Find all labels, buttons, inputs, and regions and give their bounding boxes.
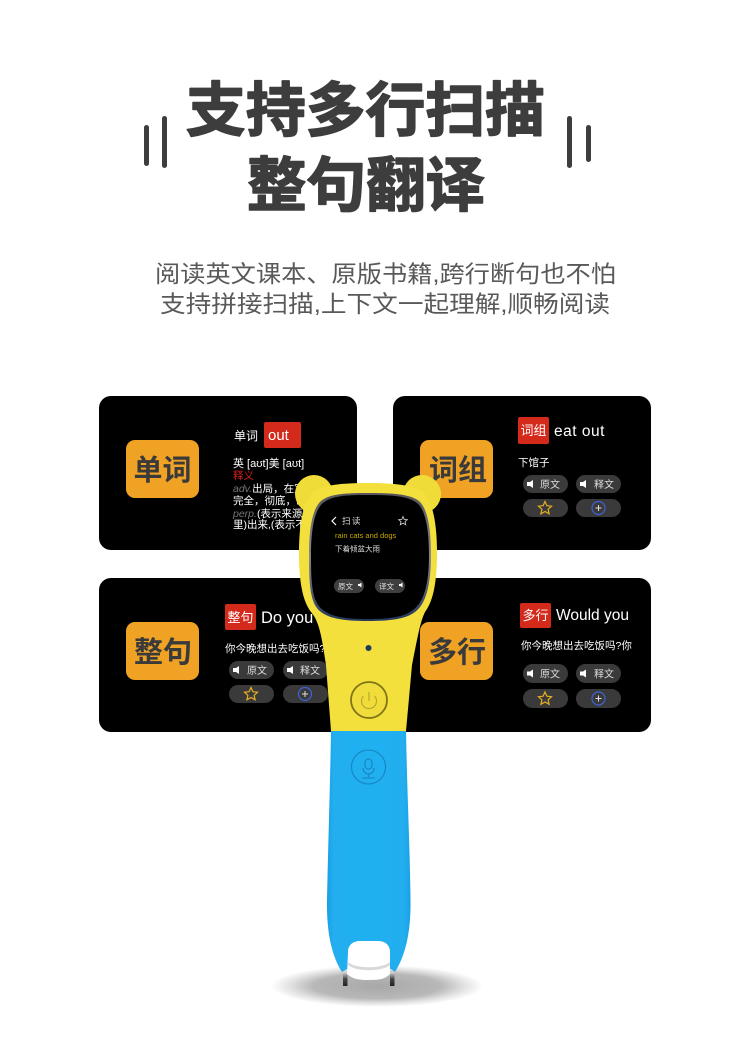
audio buttons: 释文	[300, 664, 320, 677]
badge: 词组	[420, 440, 493, 498]
translation: 你今晚想出去吃饭吗?你	[521, 639, 632, 652]
pen upper body	[299, 483, 437, 731]
translation: 你今晚想出去吃饭吗?	[225, 642, 325, 655]
phrase heading: 词组	[520, 423, 547, 438]
decorative bars right of title	[567, 116, 591, 168]
badge: 单词: 单词	[133, 454, 192, 487]
multi-line heading: Would you	[556, 607, 629, 624]
badge: 多行: 多行	[428, 636, 486, 669]
badge: 整句: 整句	[134, 636, 192, 669]
multi-line heading	[520, 603, 629, 628]
pen tip	[347, 941, 390, 980]
definition text: 释义	[233, 469, 254, 482]
audio buttons	[229, 661, 328, 679]
badge: 多行	[420, 622, 493, 680]
badge: 词组: 词组	[429, 454, 487, 487]
panel: 多行	[393, 578, 651, 732]
subtitle: 支持拼接扫描,上下文一起理解,顺畅阅读	[160, 291, 610, 317]
mic button	[352, 750, 386, 784]
screen header: 扫读	[342, 516, 362, 526]
panel: 词组	[393, 396, 651, 550]
shadow under pen	[271, 965, 483, 1007]
star and add buttons	[523, 499, 621, 517]
screen buttons	[334, 579, 405, 593]
translation: 下馆子	[518, 456, 550, 469]
indicator dot	[366, 645, 372, 651]
pen ears	[295, 475, 441, 513]
definition text: adv.出局，在室	[233, 482, 305, 495]
screen text	[335, 531, 397, 554]
star and add buttons	[523, 689, 621, 708]
audio buttons: 原文	[540, 478, 560, 491]
badge: 单词	[126, 440, 199, 498]
audio buttons: 释文	[594, 668, 614, 680]
word heading	[234, 422, 301, 448]
definition text: 完全，彻底，出	[233, 494, 306, 507]
audio buttons: 原文	[540, 668, 560, 680]
title: 整句翻译	[247, 153, 485, 219]
title	[186, 78, 545, 219]
audio buttons	[523, 664, 621, 683]
audio buttons: 原文	[247, 664, 267, 677]
definition text	[232, 456, 316, 531]
screen buttons: 译文	[379, 581, 394, 591]
sentence heading: 整句	[227, 610, 254, 625]
subtitle: 阅读英文课本、原版书籍,跨行断句也不怕	[155, 261, 616, 287]
phrase heading: eat out	[554, 423, 605, 440]
word heading: 单词	[234, 429, 258, 443]
power button	[351, 682, 387, 718]
star and add buttons	[229, 685, 328, 703]
screen	[309, 493, 431, 621]
scanning pen	[295, 475, 441, 986]
panel: 单词	[99, 396, 357, 550]
audio buttons	[523, 475, 621, 493]
definition text: perp.(表示来源)	[232, 507, 306, 520]
sentence heading: Do you	[261, 609, 313, 627]
definition text: 里)出来,(表示不在	[233, 518, 316, 531]
panel: 整句	[99, 578, 357, 732]
screen text: rain cats and dogs	[335, 531, 397, 540]
subtitle	[155, 261, 616, 317]
audio buttons: 释文	[594, 478, 614, 491]
definition text: 英 [aʊt]美 [aʊt]	[233, 456, 304, 470]
multi-line heading: 多行	[522, 608, 549, 623]
word heading: out	[268, 427, 290, 444]
badge: 整句	[126, 622, 199, 680]
pen lower body	[327, 731, 411, 972]
phrase heading	[518, 417, 605, 444]
pen legs	[343, 972, 394, 986]
sentence heading	[225, 604, 313, 630]
title: 支持多行扫描	[186, 78, 545, 144]
screen buttons: 原文	[338, 581, 353, 591]
decorative bars left of title	[144, 116, 167, 168]
screen text: 下着倾盆大雨	[335, 544, 380, 554]
